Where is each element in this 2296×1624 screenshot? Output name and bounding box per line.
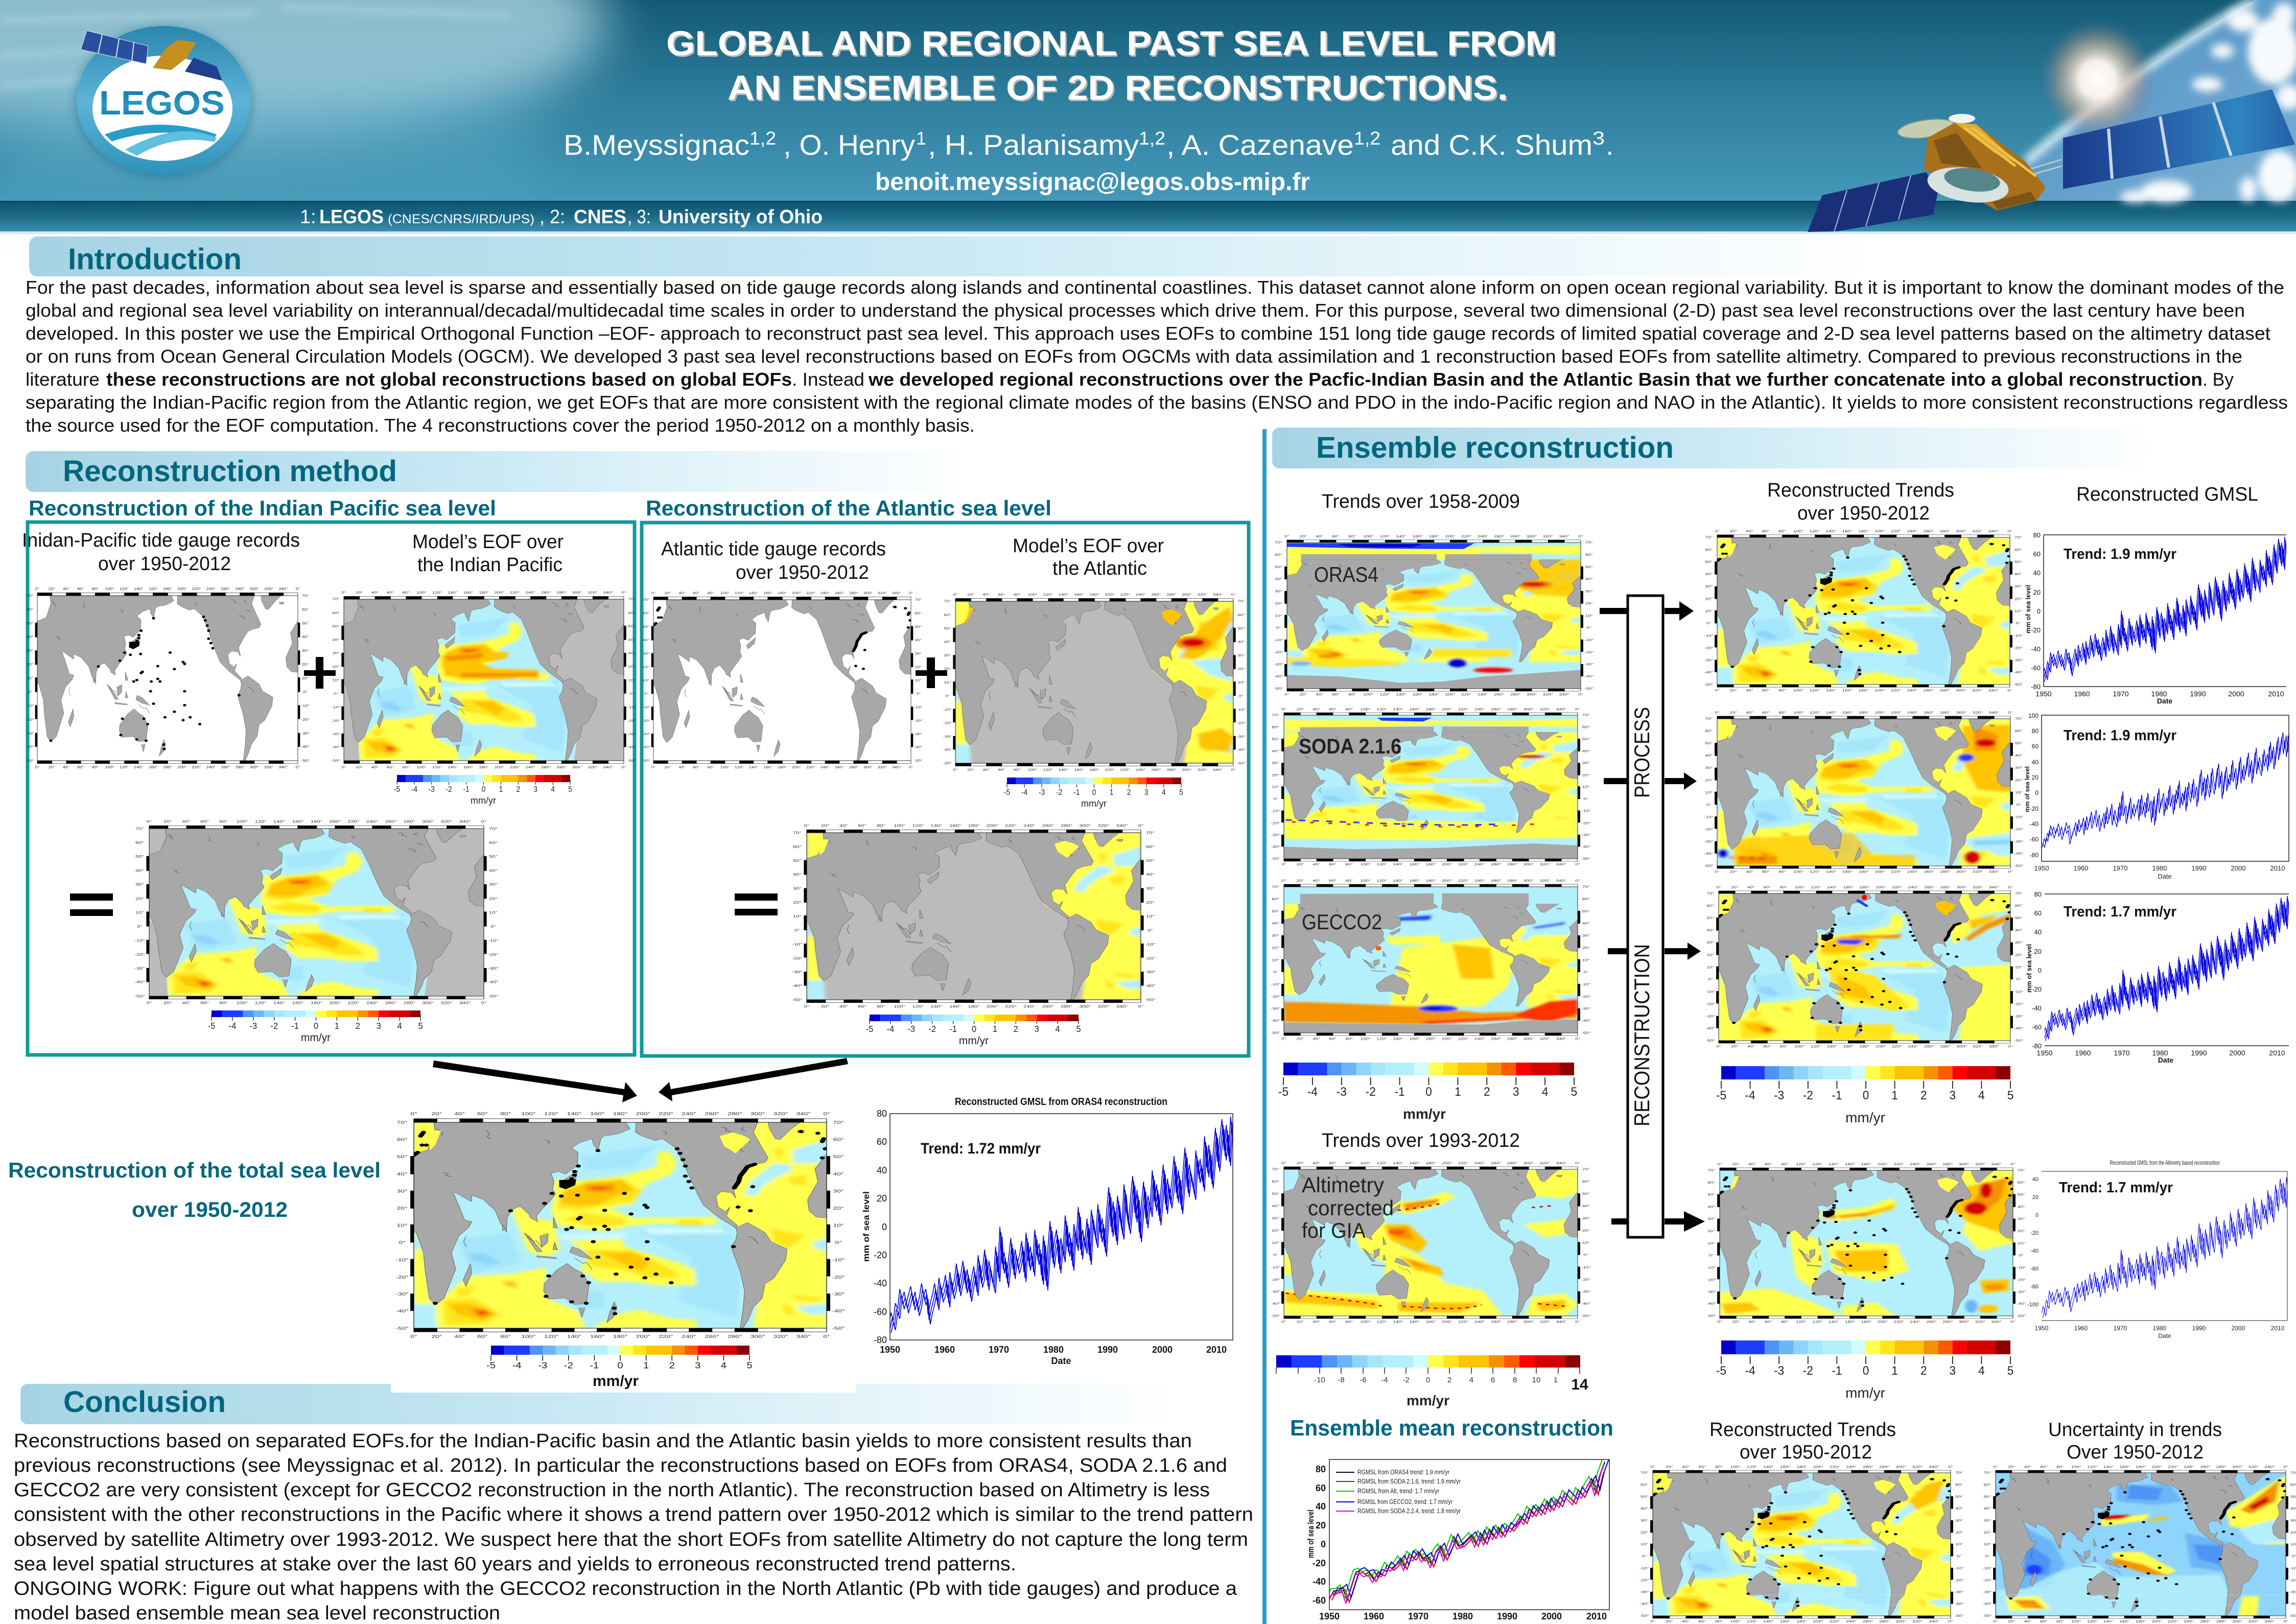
caption: ensemble reconstructed trends <box>1709 1419 1896 1463</box>
column divider <box>1262 429 1267 1624</box>
chart: GMSL altimetry based: 1970 <box>2114 1325 2127 1332</box>
colour bar <box>1278 1063 1577 1122</box>
arrow: Indian Pacific into total <box>433 1061 637 1102</box>
map: model EOF Indian Pacific <box>332 591 636 769</box>
text block: conclusion: observed by satellite Altimetry over 1993-2012. We suspect here that the short EOFs from satellite Altimetry do not capture the long term <box>14 1529 1248 1550</box>
map: GECCO2 trends: GECCO2 <box>1302 910 1382 934</box>
authors: and C.K. Shum <box>1391 129 1592 161</box>
colour bar: altimetry: -6 <box>1360 1376 1367 1384</box>
chart: GMSL from ORAS4 <box>861 1096 1237 1366</box>
authors: . <box>1606 129 1614 161</box>
affiliations: , 2: <box>540 206 565 228</box>
chart legend: RGMSL from SODA 2.1.6, trend: 1.9 mm/yr <box>1357 1477 1461 1485</box>
title: GLOBAL AND REGIONAL PAST SEA LEVEL FROM <box>668 26 1558 64</box>
chart: ensemble GMSL comparison <box>1306 1459 1609 1621</box>
chart legend: RGMSL from ORAS4 trend: 1.9 mm/yr <box>1357 1468 1450 1476</box>
chart: GMSL altimetry based: -60 <box>2030 1266 2039 1272</box>
caption: tide gauges Indian Pacific: over 1950-2012 <box>98 553 231 575</box>
authors: 3 <box>1592 128 1605 149</box>
colour bar: altimetry: -4 <box>1381 1376 1388 1384</box>
caption: tide gauges Atlantic: over 1950-2012 <box>736 562 869 583</box>
chart: GMSL SODA based: -40 <box>2030 820 2039 828</box>
chart: GMSL SODA based <box>2024 712 2292 880</box>
text block: introduction: separating the Indian-Pacific region from the Atlantic region, we get EOFs that are more consistent with the regional climate modes of the basins (ENSO and PDO in the indo-Pacific region and NAO in the Atlantic). It yields to more consistent reconstructions regardless <box>26 392 2288 413</box>
map: total reconstruction <box>395 1112 845 1339</box>
chart: GMSL from ORAS4: -80 <box>874 1335 887 1345</box>
chart: GMSL SODA based: mm of sea level <box>2024 766 2031 812</box>
header banner <box>0 0 2296 234</box>
authors: , O. Henry <box>783 129 915 161</box>
panel: PROCESS RECONSTRUCTION box: PROCESS <box>1630 707 1654 798</box>
caption: tide gauges Atlantic <box>661 538 886 583</box>
map: ORAS4 trends <box>1274 535 1594 696</box>
heading: Atlantic: Reconstruction of the Atlantic sea level <box>646 496 1051 520</box>
chart: GMSL from ORAS4: 1950 <box>880 1345 900 1355</box>
text block: introduction: these reconstructions are not global reconstructions based on global EOFs <box>106 369 792 390</box>
colour bar: altimetry: 1 <box>1554 1376 1558 1384</box>
authors: 1 <box>916 128 926 149</box>
map: Altimetry trends <box>1271 1162 1590 1324</box>
colour bar: altimetry: 8 <box>1513 1376 1517 1384</box>
text block: conclusion <box>14 1430 1253 1624</box>
arrow: row 3 <box>1608 943 1701 960</box>
chart: ensemble GMSL comparison: mm of sea level <box>1306 1510 1316 1558</box>
section bar: Reconstruction method: Reconstruction method <box>63 455 397 488</box>
colour bar <box>208 1010 423 1044</box>
caption: tide gauges Indian Pacific: Inidan-Pacific tide gauge records <box>22 530 300 551</box>
affiliations: LEGOS <box>319 206 384 228</box>
title: GLOBAL AND REGIONAL PAST SEA LEVEL FROM <box>666 24 1556 63</box>
caption: trends 1958-2009: Trends over 1958-2009 <box>1322 491 1520 512</box>
chart: GMSL SODA based: 1970 <box>2113 864 2127 872</box>
chart: GMSL from ORAS4: mm of sea level <box>861 1191 871 1262</box>
chart: GMSL SODA based: 0 <box>2035 789 2039 796</box>
caption: ensemble reconstructed trends: over 1950-2012 <box>1740 1442 1872 1463</box>
chart: GMSL altimetry based: 0 <box>2035 1212 2039 1218</box>
map: reconstructed trends SODA <box>1704 711 2023 874</box>
chart: GMSL altimetry based: -100 <box>2027 1302 2039 1308</box>
chart: GMSL SODA based: Trend: 1.9 mm/yr <box>2064 727 2176 744</box>
colour bar: altimetry: -10 <box>1314 1376 1325 1384</box>
text block: introduction: developed. In this poster we use the Empirical Orthogonal Function –EOF- approach to reconstruct past sea level. This approach uses EOFs to combine 151 long tide gauge records of limited spatial coverage and 2-D sea level patterns based on the altimetry dataset <box>26 323 2270 344</box>
colour bar <box>1716 1340 2013 1401</box>
chart: ensemble GMSL comparison: 1960 <box>1364 1611 1384 1621</box>
text block: introduction: we developed regional reconstructions over the Pacfic-Indian Basin and the Atlantic Basin that we further concatenate into a global reconstruction <box>868 369 2203 390</box>
chart: GMSL from ORAS4: 1990 <box>1097 1345 1118 1355</box>
chart: GMSL GECCO2 based <box>2025 890 2292 1064</box>
chart: GMSL altimetry based: Date <box>2158 1332 2171 1339</box>
logo: LEGOS <box>99 84 225 122</box>
chart: ensemble GMSL comparison: 0 <box>1321 1539 1326 1549</box>
caption: reconstructed trends <box>1767 480 1954 524</box>
affiliations: (CNES/CNRS/IRD/UPS) <box>388 212 534 226</box>
caption: total sea level <box>8 1158 381 1221</box>
text block: introduction: the source used for the EOF computation. The 4 reconstructions cover the period 1950-2012 on a monthly basis. <box>26 415 975 436</box>
chart: GMSL altimetry based: 1950 <box>2035 1325 2049 1332</box>
chart: ensemble GMSL comparison: 1950 <box>1319 1611 1340 1621</box>
chart: GMSL from ORAS4: 2010 <box>1206 1345 1227 1355</box>
chart: GMSL SODA based: 1980 <box>2152 864 2167 872</box>
caption: uncertainty: Uncertainty in trends <box>2048 1419 2222 1441</box>
chart: GMSL altimetry based: -20 <box>2030 1230 2039 1236</box>
caption: uncertainty <box>2048 1419 2222 1463</box>
authors: , A. Cazenave <box>1166 129 1354 161</box>
caption: model EOF Atlantic <box>1013 535 1164 579</box>
map: reconstructed Indian Pacific <box>134 820 499 1005</box>
chart: GMSL SODA based: Date <box>2158 873 2172 880</box>
colour bar <box>866 1015 1081 1047</box>
caption: tide gauges Indian Pacific <box>22 530 300 575</box>
section bar: Ensemble reconstruction: Ensemble reconstruction <box>1316 431 1674 464</box>
authors: B.Meyssignac <box>564 129 749 161</box>
chart: GMSL SODA based: -60 <box>2030 836 2039 843</box>
colour bar: altimetry: 14 <box>1571 1376 1588 1393</box>
chart: ensemble GMSL comparison: 20 <box>1316 1520 1326 1531</box>
text block: introduction: . Instead <box>792 369 864 390</box>
panel: Atlantic reconstruction <box>642 523 1249 1056</box>
caption: model EOF Indian Pacific: Model’s EOF over <box>412 531 564 553</box>
map: ensemble mean trends <box>1639 1465 1964 1623</box>
chart: GMSL SODA based: 20 <box>2032 774 2039 781</box>
chart: GMSL from ORAS4: Reconstructed GMSL from ORAS4 reconstruction <box>955 1096 1167 1108</box>
colour bar: altimetry: -2 <box>1402 1376 1410 1384</box>
text block: introduction: . By <box>2203 369 2234 390</box>
caption: model EOF Atlantic: the Atlantic <box>1052 558 1147 579</box>
affiliations: , 3: <box>627 206 651 228</box>
colour bar: mm/yr <box>471 795 496 806</box>
caption: total sea level: over 1950-2012 <box>132 1197 288 1221</box>
heading: Indian Pacific: Reconstruction of the Indian Pacific sea level <box>29 496 496 520</box>
colour bar: mm/yr <box>1845 1385 1885 1401</box>
map: reconstructed trends altimetry <box>1707 1163 2026 1324</box>
header background: ocean and clouds <box>0 0 608 201</box>
sun glow <box>2039 19 2156 139</box>
chart: GMSL altimetry based: Trend: 1.7 mm/yr <box>2059 1180 2173 1196</box>
chart: ensemble GMSL comparison: 1980 <box>1452 1611 1473 1621</box>
map: model EOF Atlantic <box>943 593 1246 772</box>
section bar: Conclusion: Conclusion <box>63 1385 226 1419</box>
map: reconstructed trends ORAS4 <box>1704 530 2023 692</box>
chart: GMSL from ORAS4: Date <box>1051 1356 1071 1366</box>
chart: GMSL altimetry based: 20 <box>2032 1194 2039 1201</box>
caption: reconstructed trends: Reconstructed Trends <box>1767 480 1954 501</box>
authors: 1,2 <box>749 128 776 149</box>
chart: GMSL altimetry based: -80 <box>2030 1284 2039 1290</box>
chart: GMSL SODA based: 80 <box>2032 727 2039 735</box>
map: Altimetry trends: Altimetry <box>1302 1173 1384 1197</box>
colour bar <box>394 775 572 806</box>
chart: GMSL from ORAS4: 80 <box>877 1109 887 1119</box>
colour bar: altimetry <box>1276 1355 1588 1408</box>
colour bar <box>1004 778 1183 809</box>
colour bar: altimetry: mm/yr <box>1407 1393 1449 1408</box>
chart: GMSL GECCO2 based: Trend: 1.7 mm/yr <box>2064 904 2176 920</box>
chart legend: RGMSL from SODA 2.2.4, trend: 1.8 mm/yr <box>1357 1507 1461 1515</box>
chart: ensemble GMSL comparison: 1990 <box>1497 1611 1517 1621</box>
chart: GMSL from ORAS4: -40 <box>874 1278 887 1288</box>
caption: ensemble reconstructed trends: Reconstructed Trends <box>1709 1419 1896 1441</box>
chart: GMSL altimetry based: 2000 <box>2232 1325 2245 1332</box>
text block: introduction: or on runs from Ocean General Circulation Models (OGCM). We developed 3 past sea level reconstructions based on EOFs from OGCMs with data assimilation and 1 reconstruction based EOFs from satellite altimetry. Compared to previous reconstructions in the <box>26 346 2242 367</box>
section bar: Introduction: Introduction <box>68 243 242 276</box>
affiliations: CNES <box>574 206 626 228</box>
chart: GMSL SODA based: -80 <box>2030 852 2039 859</box>
chart: GMSL SODA based: 40 <box>2032 759 2039 766</box>
text block: conclusion: Reconstructions based on separated EOFs.for the Indian-Pacific basin and the Atlantic basin yields to more consistent results than <box>14 1430 1192 1452</box>
caption: tide gauges Atlantic: Atlantic tide gauge records <box>661 538 886 560</box>
caption: model EOF Indian Pacific: the Indian Pacific <box>417 554 563 576</box>
text block: conclusion: previous reconstructions (see Meyssignac et al. 2012). In particular the reconstructions based on EOFs from ORAS4, SODA 2.1.6 and <box>14 1455 1227 1476</box>
satellite <box>1808 89 2295 232</box>
map: tide gauges Atlantic <box>642 591 922 769</box>
panel: PROCESS RECONSTRUCTION box: RECONSTRUCTION <box>1630 944 1654 1126</box>
colour bar: mm/yr <box>959 1035 989 1047</box>
chart: ensemble GMSL comparison: 2010 <box>1586 1611 1607 1621</box>
chart: GMSL SODA based: 1990 <box>2192 864 2206 872</box>
chart: GMSL SODA based: 2000 <box>2231 864 2245 872</box>
arrow: row 4 <box>1611 1211 1705 1232</box>
heading: Ensemble mean reconstruction: Ensemble mean reconstruction <box>1290 1416 1613 1441</box>
chart: GMSL altimetry based: Reconstructed GMSL from the Altimetry based reconstruction <box>2110 1159 2219 1166</box>
colour bar: mm/yr <box>1845 1110 1885 1125</box>
chart: GMSL SODA based: 2010 <box>2270 864 2285 872</box>
title: AN ENSEMBLE OF 2D RECONSTRUCTIONS. <box>729 70 1509 109</box>
caption: model EOF Atlantic: Model’s EOF over <box>1013 535 1164 557</box>
colour bar: mm/yr <box>1081 798 1107 809</box>
chart: GMSL altimetry based: 1990 <box>2192 1325 2206 1332</box>
section bar: Conclusion <box>20 1379 1181 1424</box>
chart: GMSL altimetry based: 1960 <box>2074 1325 2088 1332</box>
panel: PROCESS RECONSTRUCTION box <box>1628 596 1663 1237</box>
chart: GMSL SODA based: -20 <box>2030 805 2039 812</box>
map: SODA trends: SODA 2.1.6 <box>1299 734 1401 758</box>
icon: plus <box>304 657 336 689</box>
section bar: Reconstruction method <box>26 451 971 492</box>
map: uncertainty in trends <box>1983 1465 2296 1623</box>
chart legend <box>1336 1468 1461 1515</box>
chart: GMSL ORAS4 based: Trend: 1.9 mm/yr <box>2064 546 2176 562</box>
chart: GMSL from ORAS4: 1970 <box>989 1345 1009 1355</box>
caption: reconstructed GMSL: Reconstructed GMSL <box>2076 484 2258 505</box>
chart: GMSL ORAS4 based <box>2024 531 2289 705</box>
chart: GMSL from ORAS4: -60 <box>874 1307 887 1317</box>
map: ORAS4 trends: ORAS4 <box>1314 562 1378 586</box>
chart: GMSL SODA based: 100 <box>2028 712 2039 719</box>
chart: ensemble GMSL comparison: -40 <box>1313 1576 1326 1587</box>
chart: GMSL altimetry based: 1980 <box>2153 1325 2167 1332</box>
arrow: row 1 <box>1600 601 1694 621</box>
chart: ensemble GMSL comparison: -60 <box>1313 1595 1326 1606</box>
colour bar: altimetry: 0 <box>1426 1376 1430 1384</box>
panel: Indian Pacific reconstruction <box>22 522 636 1055</box>
map: GECCO2 trends <box>1271 879 1590 1041</box>
icon: equals <box>735 893 778 915</box>
chart: GMSL SODA based: 1960 <box>2074 864 2088 872</box>
map: Altimetry trends: for GIA <box>1302 1218 1366 1242</box>
chart: GMSL from ORAS4: 0 <box>882 1222 887 1232</box>
colour bar: altimetry: 6 <box>1491 1376 1495 1384</box>
chart: GMSL from ORAS4: 1960 <box>934 1345 955 1355</box>
text block: introduction <box>26 277 2288 436</box>
section bar: Ensemble reconstruction <box>1272 428 2156 468</box>
email: benoit.meyssignac@legos.obs-mip.fr <box>875 169 1310 196</box>
caption: trends 1993-2012: Trends over 1993-2012 <box>1322 1130 1520 1151</box>
caption: total sea level: Reconstruction of the total sea level <box>8 1158 381 1182</box>
chart: GMSL from ORAS4: Trend: 1.72 mm/yr <box>921 1140 1041 1157</box>
logo <box>74 26 253 179</box>
text block: introduction: For the past decades, information about sea level is sparse and essentially based on tide gauge records along islands and continental coastlines. This dataset cannot alone inform on open ocean regional variability. But it is important to know the dominant modes of the <box>26 277 2284 298</box>
chart: ensemble GMSL comparison: 80 <box>1316 1464 1326 1474</box>
colour bar: altimetry: 2 <box>1447 1376 1451 1384</box>
chart: ensemble GMSL comparison: 1970 <box>1408 1611 1428 1621</box>
title <box>666 24 1558 109</box>
chart: GMSL altimetry based: 2010 <box>2271 1325 2285 1332</box>
map: SODA trends <box>1271 708 1590 866</box>
authors <box>564 128 1614 161</box>
colour bar: mm/yr <box>301 1032 331 1044</box>
colour bar: altimetry: 10 <box>1532 1376 1540 1384</box>
affiliations <box>300 206 823 228</box>
earth limb with clouds <box>2025 0 2296 203</box>
colour bar: altimetry: -8 <box>1338 1376 1345 1384</box>
map: reconstructed trends GECCO2 <box>1706 886 2023 1048</box>
colour bar <box>1716 1066 2013 1125</box>
colour bar <box>486 1346 753 1370</box>
map: Altimetry trends: corrected <box>1308 1196 1394 1220</box>
colour bar: mm/yr <box>1403 1106 1446 1122</box>
authors: 1,2 <box>1139 128 1165 149</box>
icon: plus <box>916 657 947 688</box>
text block: conclusion: ONGOING WORK: Figure out what happens with the GECCO2 reconstruction in the North Atlantic (Pb with tide gauges) and produce a <box>14 1578 1237 1599</box>
text block: conclusion: GECCO2 are very consistent (except for GECCO2 reconstruction in the north Atlantic). The reconstruction based on Altimetry is less <box>14 1479 1210 1501</box>
chart: ensemble GMSL comparison: 2000 <box>1541 1611 1562 1621</box>
caption: model EOF Indian Pacific <box>412 531 564 576</box>
section bar: Introduction <box>29 237 1880 276</box>
text block: introduction: global and regional sea level variability on interannual/decadal/multidecadal time scales in order to understand the physical processes which drive them. For this purpose, several two dimensional (2-D) past sea level reconstructions over the last century have been <box>26 300 2245 321</box>
chart: ensemble GMSL comparison: 40 <box>1316 1501 1326 1512</box>
chart: GMSL from ORAS4: 2000 <box>1152 1345 1173 1355</box>
chart: GMSL from ORAS4: 1980 <box>1043 1345 1064 1355</box>
chart: GMSL SODA based: 1950 <box>2034 864 2049 872</box>
text block: introduction: literature <box>26 369 100 390</box>
caption: reconstructed trends: over 1950-2012 <box>1797 503 1930 524</box>
affiliations: 1: <box>300 206 316 228</box>
chart: GMSL altimetry based: -40 <box>2030 1248 2039 1254</box>
caption: uncertainty: Over 1950-2012 <box>2067 1442 2204 1463</box>
chart legend: RGMSL from GECCO2, trend: 1.7 mm/yr <box>1357 1498 1453 1505</box>
icon: equals <box>70 893 113 916</box>
chart: GMSL altimetry based: 40 <box>2032 1176 2039 1183</box>
arrow: Atlantic into total <box>659 1058 848 1101</box>
chart: GMSL SODA based: 60 <box>2032 743 2039 750</box>
chart: GMSL from ORAS4: 60 <box>877 1137 887 1147</box>
chart: GMSL from ORAS4: 40 <box>877 1165 887 1175</box>
arrow: row 2 <box>1604 772 1697 790</box>
chart legend: RGMSL from Alt, trend: 1.7 mm/yr <box>1357 1487 1440 1495</box>
map: tide gauges Indian Pacific <box>26 587 310 769</box>
label: mm/yr total: mm/yr <box>593 1373 639 1390</box>
authors: , H. Palanisamy <box>928 129 1139 161</box>
colour bar: altimetry: 4 <box>1469 1376 1473 1384</box>
title: AN ENSEMBLE OF 2D RECONSTRUCTIONS. <box>728 68 1508 107</box>
chart: GMSL from ORAS4: 20 <box>877 1193 887 1204</box>
text block: conclusion: consistent with the other reconstructions in the Pacific where it shows a trend pattern over 1950-2012 which is similar to the trend pattern <box>14 1504 1253 1525</box>
chart: ensemble GMSL comparison: 60 <box>1316 1483 1326 1493</box>
map: reconstructed Atlantic <box>792 824 1156 1008</box>
chart: ensemble GMSL comparison: -20 <box>1313 1558 1326 1568</box>
text block: conclusion: model based ensemble mean sea level reconstruction <box>14 1603 500 1624</box>
chart: GMSL from ORAS4: -20 <box>874 1250 887 1260</box>
affiliations: University of Ohio <box>659 206 823 228</box>
chart: GMSL altimetry based <box>2027 1159 2291 1339</box>
authors: 1,2 <box>1354 128 1380 149</box>
text block: conclusion: sea level spatial structures at stake over the last 60 years and yields to erroneous reconstructed trend patterns. <box>14 1554 1016 1575</box>
